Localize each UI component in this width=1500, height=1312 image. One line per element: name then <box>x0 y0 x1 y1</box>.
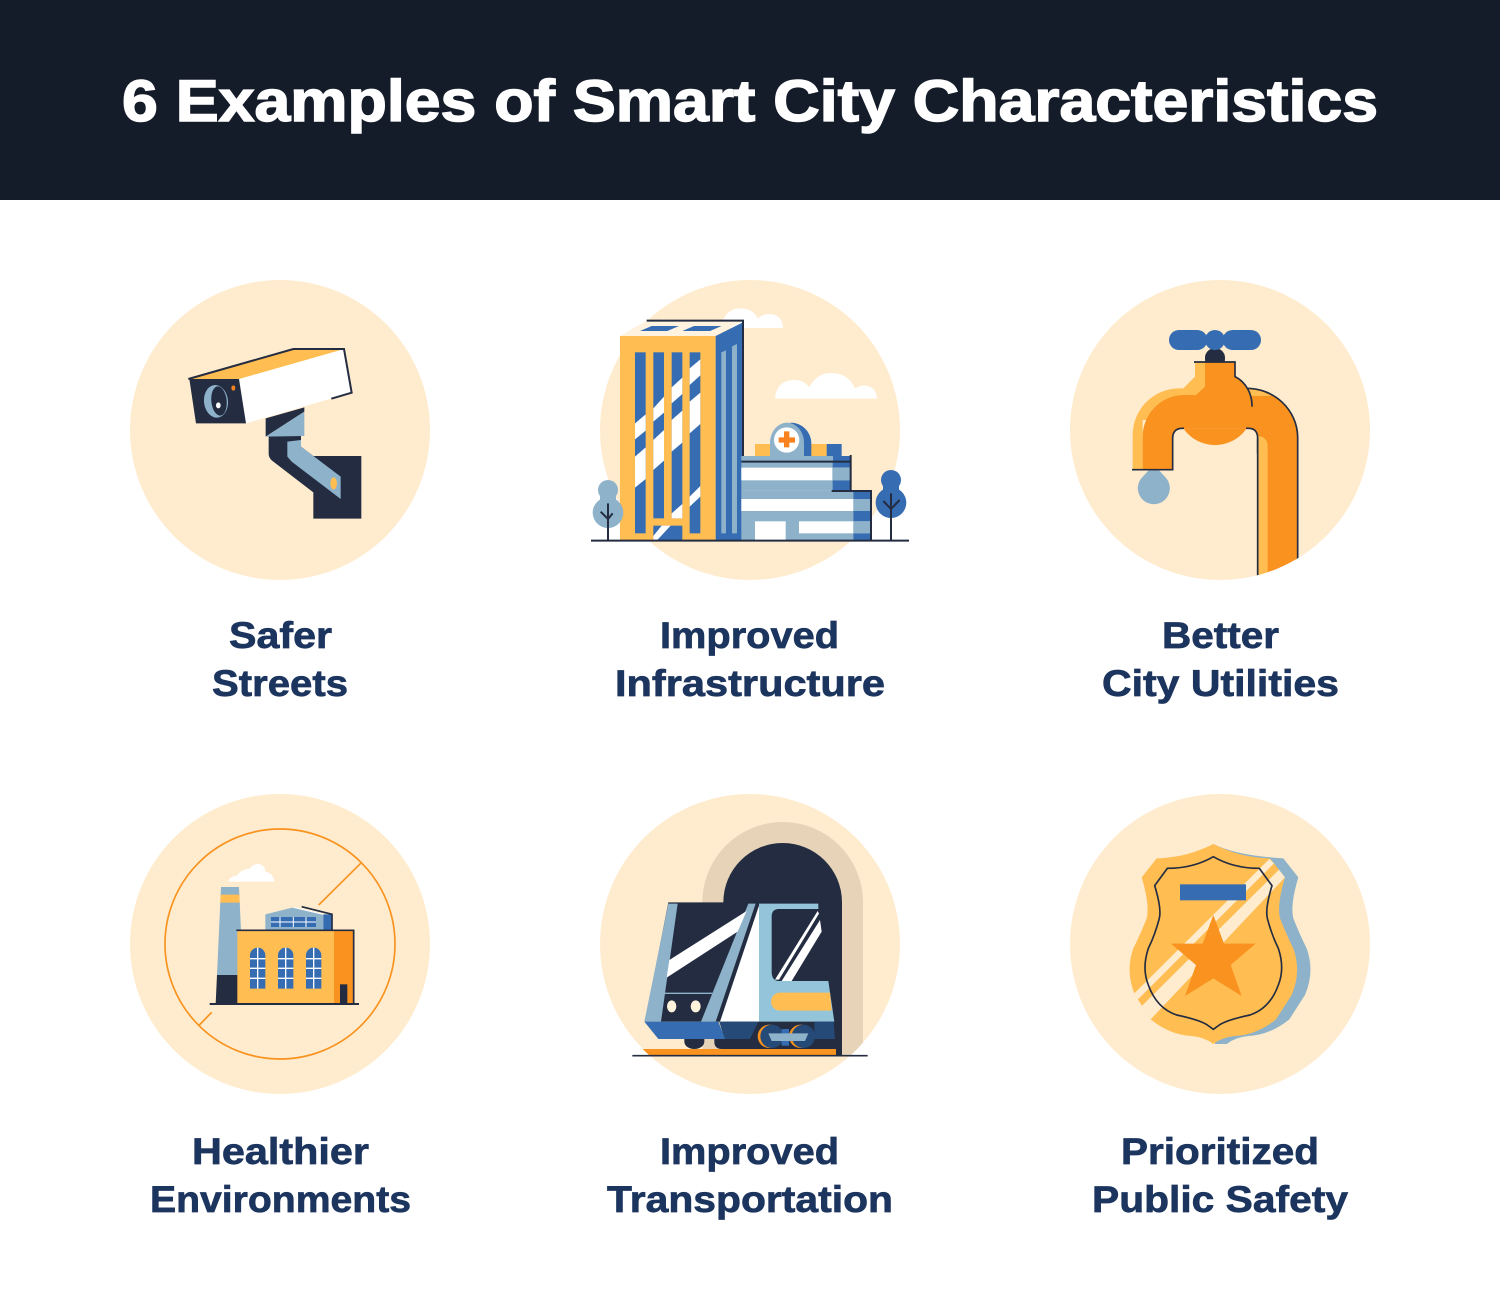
icon: tower and hospital <box>591 308 909 541</box>
panel: safer streets <box>130 280 430 704</box>
label: safer streets: Streets <box>212 663 348 704</box>
panel: prioritized public safety <box>1070 794 1370 1220</box>
label: better city utilities <box>1102 615 1339 704</box>
label: improved transportation <box>607 1131 893 1220</box>
label: better city utilities: City Utilities <box>1102 663 1339 704</box>
icon: train leaving tunnel <box>632 822 868 1056</box>
label: improved infrastructure: Infrastructure <box>615 663 885 704</box>
panel: better city utilities <box>1070 280 1370 704</box>
label: healthier environments: Environments <box>150 1179 411 1220</box>
label: improved infrastructure: Improved <box>660 615 839 656</box>
label: better city utilities: Better <box>1162 615 1279 656</box>
panel: improved infrastructure <box>591 280 909 704</box>
label: improved transportation: Improved <box>660 1131 839 1172</box>
label: prioritized public safety <box>1092 1131 1348 1220</box>
title: 6 Examples of Smart City Characteristics <box>122 69 1378 134</box>
label: safer streets: Safer <box>229 615 332 656</box>
icon: police badge <box>1130 844 1310 1044</box>
icon: prohibited factory <box>165 829 395 1059</box>
icon: water tap <box>1132 330 1298 580</box>
icon: security camera <box>188 349 361 519</box>
label: healthier environments: Healthier <box>192 1131 369 1172</box>
label: healthier environments <box>150 1131 411 1220</box>
label: improved infrastructure <box>615 615 885 704</box>
label: improved transportation: Transportation <box>607 1179 893 1220</box>
label: prioritized public safety: Prioritized <box>1121 1131 1319 1172</box>
panel: improved transportation <box>600 794 900 1220</box>
panel: healthier environments <box>130 794 430 1220</box>
label: safer streets <box>212 615 348 704</box>
label: prioritized public safety: Public Safety <box>1092 1179 1348 1220</box>
header banner <box>0 0 1500 200</box>
